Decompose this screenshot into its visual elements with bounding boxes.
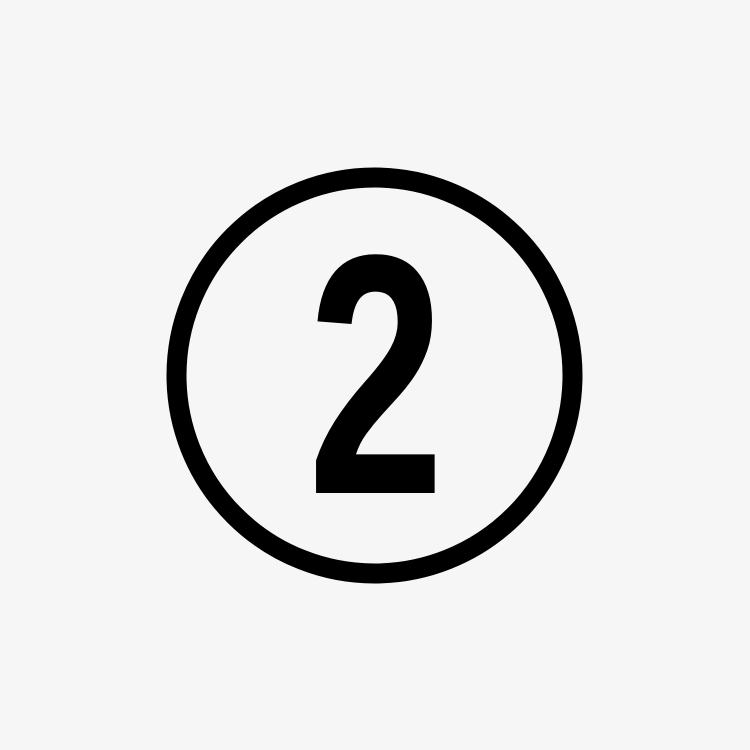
number 2: 2 <box>308 184 444 566</box>
circle outline <box>176 178 572 574</box>
